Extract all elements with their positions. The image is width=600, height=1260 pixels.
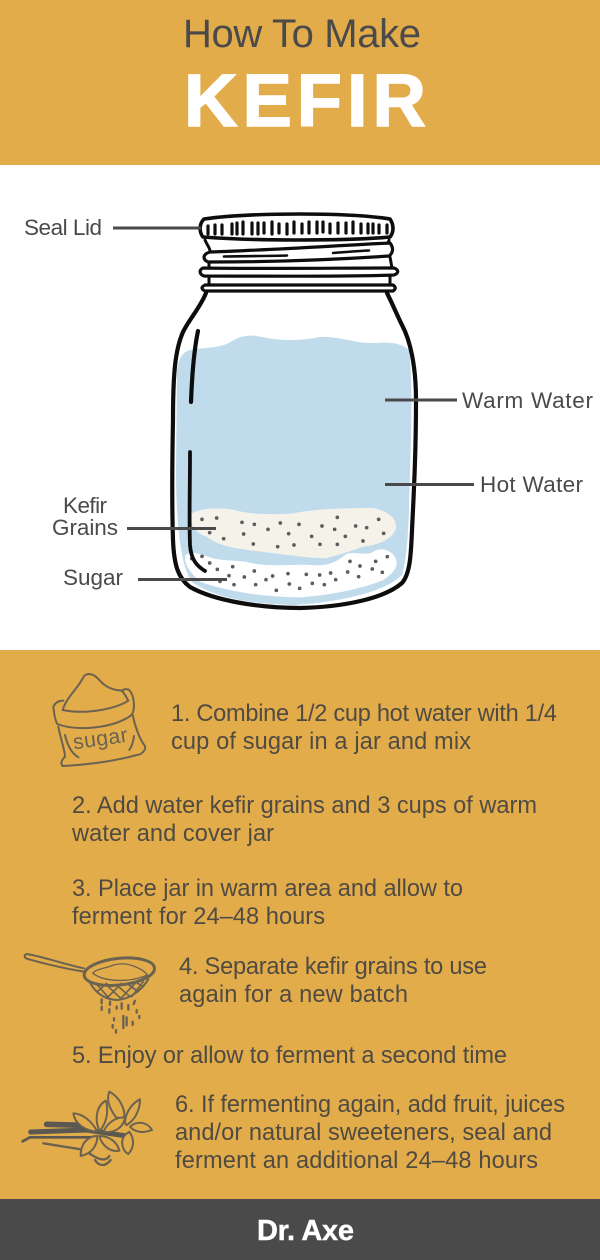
label: hot water [385, 472, 584, 497]
label: kefir grains: Grains [52, 515, 118, 540]
jar lid [200, 214, 398, 291]
step 4 text [179, 954, 487, 1008]
step 3 text: 3. Place jar in warm area and allow to [72, 876, 463, 902]
label: seal lid [24, 215, 201, 240]
step 5 text: 5. Enjoy or allow to ferment a second time [72, 1043, 507, 1069]
step 3 text: ferment for 24–48 hours [72, 904, 325, 930]
icon: sugar sack: sugar [71, 723, 129, 754]
panel: instructions [0, 650, 600, 1199]
step 1 text: cup of sugar in a jar and mix [171, 729, 471, 755]
step 4 text: again for a new batch [179, 982, 408, 1008]
step 6 text: and/or natural sweeteners, seal and [175, 1120, 552, 1146]
panel: footer brand [0, 1199, 600, 1260]
step 2 text [71, 793, 537, 847]
step 6 text [175, 1092, 565, 1174]
icon: strainer [25, 954, 156, 1033]
label: seal lid: Seal Lid [24, 215, 102, 240]
label: kefir grains [52, 493, 216, 540]
label: sugar: Sugar [63, 565, 124, 590]
step 2 text: water and cover jar [71, 821, 274, 847]
label: warm water [385, 388, 594, 413]
label: warm water: Warm Water [462, 388, 594, 413]
step 1 text [171, 701, 557, 755]
brand name: Dr. Axe [257, 1215, 354, 1247]
water [176, 336, 411, 605]
step 6 text: 6. If fermenting again, add fruit, juices [175, 1092, 565, 1118]
label: sugar [63, 565, 227, 590]
step 2 text: 2. Add water kefir grains and 3 cups of warm [72, 793, 537, 819]
step 1 text: 1. Combine 1/2 cup hot water with 1/4 [171, 701, 557, 727]
kefir grains layer [185, 508, 397, 597]
title: how to make: How To Make [183, 12, 421, 56]
jar outline [172, 214, 416, 608]
icon: vanilla flower and beans [23, 1092, 152, 1165]
step 3 text [72, 876, 463, 930]
icon: sugar sack [53, 674, 145, 766]
step 4 text: 4. Separate kefir grains to use [179, 954, 487, 980]
title: kefir: KEFIR [184, 59, 426, 142]
label: hot water: Hot Water [480, 472, 584, 497]
panel: header [0, 0, 600, 165]
step 6 text: ferment an additional 24–48 hours [175, 1148, 538, 1174]
panel: jar diagram [0, 165, 600, 650]
label: kefir grains: Kefir [63, 493, 108, 518]
